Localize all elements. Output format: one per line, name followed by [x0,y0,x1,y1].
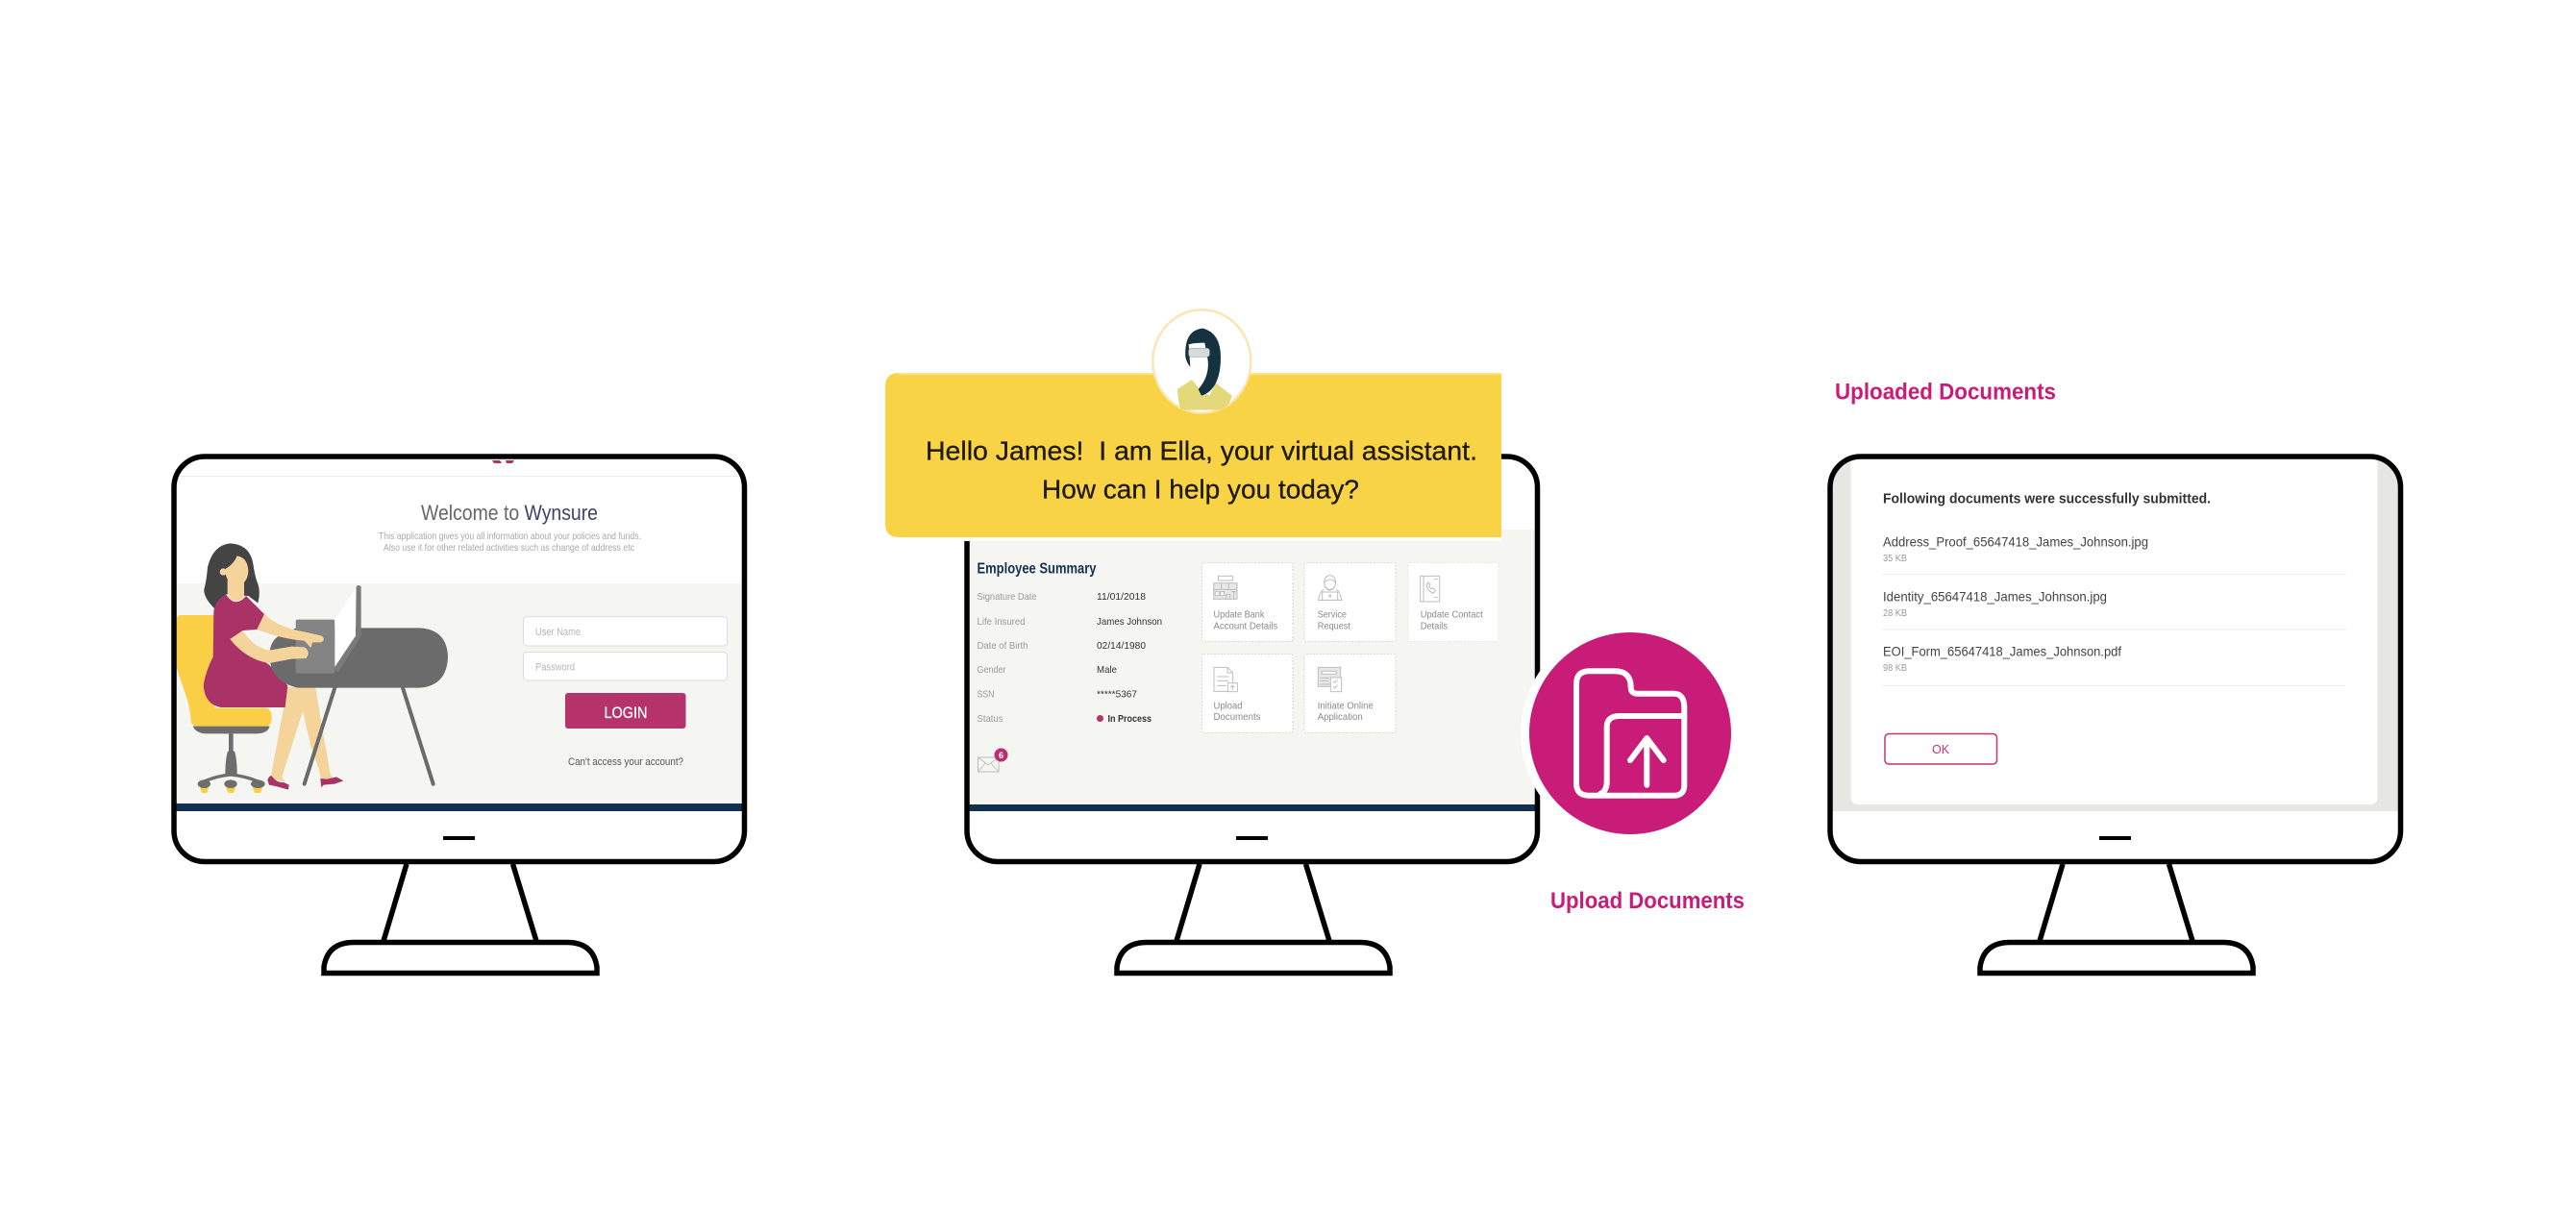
login intro text: Also use it for other related activities such as change of address etc [384,542,634,554]
card: upload documents: Documents [1213,711,1261,723]
summary field labels: SSN [977,688,994,700]
assistant greeting banner [885,309,1501,541]
card: service request: Service [1318,609,1347,621]
card: initiate online application [1304,654,1396,732]
file: identity: Identity_65647418_James_Johnson.jpg [1883,588,2107,604]
card: update bank account details: Update Bank [1213,609,1265,621]
summary field values: In Process [1107,713,1152,725]
file: EOI form: 98 KB [1883,663,1907,674]
file: address proof: Address_Proof_65647418_James_Johnson.jpg [1883,534,2148,550]
summary field values: 11/01/2018 [1097,591,1146,603]
card: upload documents: Upload [1213,700,1243,711]
input: user name [523,617,727,646]
monitor frame [174,457,744,973]
file: EOI form: EOI_Form_65647418_James_Johnson.pdf [1883,644,2121,659]
file: EOI form [1882,644,2346,686]
file: address proof: 35 KB [1883,554,1907,564]
icon: mail with badge [978,748,1007,772]
summary field values: *****5367 [1097,688,1137,700]
input: user name: User Name [535,627,581,638]
input: password [523,652,727,680]
file: identity: 28 KB [1883,608,1907,619]
file: address proof [1882,534,2346,575]
card: update bank account details [1201,563,1293,642]
card: upload documents [1201,654,1293,732]
label: upload documents: Upload Documents [1550,888,1745,914]
monitor frame [967,457,1538,973]
greeting text: Hello James! I am Ella, your virtual assistant. [926,436,1477,465]
icon: mail with badge: 6 [999,751,1003,760]
monitor 2: employee summary [967,457,1538,973]
summary field labels [977,591,1037,725]
summary field labels: Date of Birth [977,640,1028,652]
monitor 3: submitted documents [1830,452,2401,973]
summary field values: James Johnson [1097,616,1162,628]
monitor frame [1830,457,2401,973]
card: update contact details [1408,563,1499,642]
monitor 1: login screen [174,457,744,973]
login intro text: This application gives you all information about your policies and funds. [379,531,641,542]
icon: upload folder in magenta circle [1521,624,1740,843]
summary field labels: Status [977,713,1003,725]
illustration: woman at laptop [177,543,448,793]
card: update contact details: Details [1421,621,1448,632]
label: uploaded documents: Uploaded Documents [1835,379,2056,406]
summary field labels: Signature Date [977,591,1037,603]
card: initiate online application: Application [1318,711,1363,723]
summary field values: Male [1097,664,1117,676]
summary field labels: Gender [977,664,1006,676]
account help link: Can't access your account? [568,756,683,768]
file: identity [1882,588,2346,630]
login button: LOGIN [604,704,648,722]
employee summary heading: Employee Summary [977,561,1097,577]
card: initiate online application: Initiate Online [1318,700,1374,711]
summary field values [1097,591,1162,725]
card: service request: Request [1318,621,1350,632]
card: update bank account details: Account Details [1213,620,1277,631]
login welcome heading: Welcome to Wynsure [421,501,598,525]
login screen background [177,460,742,811]
dashboard background [969,530,1535,811]
summary field values: 02/14/1980 [1097,640,1146,652]
greeting text: How can I help you today? [1042,475,1359,504]
OK button [1885,734,1997,764]
OK button: OK [1932,743,1950,756]
screen background and dialog [1832,460,2398,811]
card: update contact details: Update Contact [1421,609,1483,621]
greeting text [926,436,1477,504]
input: password: Password [535,661,575,673]
login button [565,693,686,729]
login intro text [379,531,641,554]
summary field labels: Life Insured [977,616,1026,628]
dialog heading: Following documents were successfully submitted. [1883,492,2211,507]
avatar: Ella [1152,309,1251,413]
card: service request [1304,563,1396,642]
